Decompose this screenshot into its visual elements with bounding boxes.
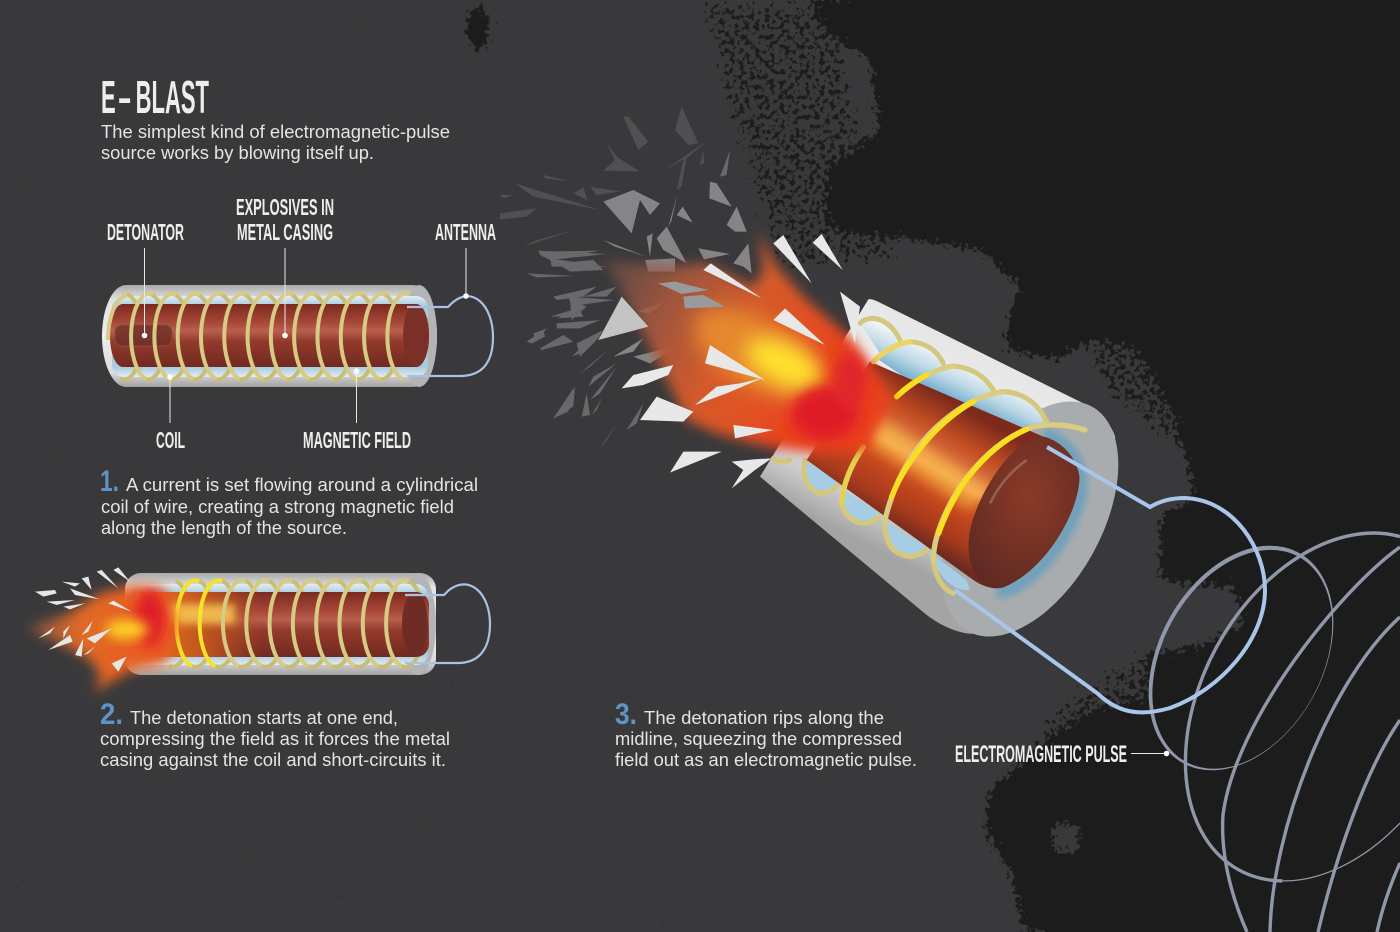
explosive core xyxy=(140,592,429,657)
diagram 2: detonation starts xyxy=(27,567,490,692)
label: explosives: EXPLOSIVES IN xyxy=(236,194,334,220)
fireball xyxy=(603,232,893,453)
explosive core xyxy=(807,362,1079,588)
label: detonator: DETONATOR xyxy=(107,219,184,245)
intro text: source works by blowing itself up. xyxy=(101,143,374,163)
leader line xyxy=(1131,752,1166,754)
step 1 text xyxy=(100,465,478,538)
pulse label xyxy=(955,741,1169,768)
antenna xyxy=(405,584,490,663)
cylinder body xyxy=(760,299,1155,666)
ring 4 xyxy=(1270,617,1400,932)
ring 6 xyxy=(1377,863,1400,932)
step 2 description: The detonation starts at one end, xyxy=(130,708,398,728)
number 2: 2. xyxy=(100,698,123,731)
label: magnetic field: MAGNETIC FIELD xyxy=(303,427,411,453)
explosive core xyxy=(110,304,429,367)
step 3 description: field out as an electromagnetic pulse. xyxy=(615,750,917,770)
hot coil strands xyxy=(176,580,222,666)
detonator xyxy=(115,325,172,346)
blue field glow xyxy=(860,318,1047,430)
coil rear strands xyxy=(169,581,424,667)
step 3 description xyxy=(615,708,917,770)
core end face xyxy=(969,437,1079,588)
antenna xyxy=(955,447,1265,712)
ring 2 xyxy=(1185,533,1400,881)
casing end cap xyxy=(401,285,437,387)
leader dots xyxy=(142,293,469,380)
pulse rings xyxy=(1111,513,1400,932)
front coil strands xyxy=(842,342,1085,560)
coil front strands xyxy=(108,293,410,379)
diagram 1: intact source xyxy=(102,285,493,387)
number 1: 1. xyxy=(100,465,119,498)
step 2 description: compressing the field as it forces the metal xyxy=(100,729,450,749)
shrapnel in fire xyxy=(658,282,725,308)
intro text xyxy=(101,122,450,163)
field band xyxy=(132,584,428,665)
step 3 description: midline, squeezing the compressed xyxy=(615,729,902,749)
intro text: The simplest kind of electromagnetic-pulse xyxy=(101,122,450,142)
antenna xyxy=(407,296,493,376)
label: coil: COIL xyxy=(156,427,185,453)
coil rear strands xyxy=(120,294,399,380)
step 3 text xyxy=(615,698,917,770)
title: E–BLAST xyxy=(101,71,209,123)
end cap xyxy=(400,573,436,675)
label text: ELECTROMAGNETIC PULSE xyxy=(955,741,1127,768)
leader lines xyxy=(144,248,466,423)
number 3: 3. xyxy=(615,698,637,731)
small explosion xyxy=(27,567,177,692)
label: metal casing: METAL CASING xyxy=(237,219,333,245)
step 2 text xyxy=(100,698,450,770)
leader dot xyxy=(1164,751,1169,756)
casing xyxy=(102,285,437,387)
rear coil strands xyxy=(773,318,1047,593)
shrapnel xyxy=(35,567,132,675)
casing xyxy=(125,573,436,675)
receding shrapnel xyxy=(500,107,708,247)
core heat glow xyxy=(867,413,993,510)
step 1 description: A current is set flowing around a cylindrical xyxy=(126,475,478,495)
casing end cap xyxy=(905,372,1155,666)
step 1 description xyxy=(101,475,478,538)
ring 5 xyxy=(1318,720,1400,932)
casing xyxy=(760,299,1115,634)
white shrapnel xyxy=(598,234,860,488)
ink splatter texture xyxy=(467,0,1400,932)
step 2 description: casing against the coil and short-circuits it. xyxy=(100,750,446,770)
ring 2 thin lower edge xyxy=(1282,823,1400,881)
core end face xyxy=(402,592,428,657)
fireball xyxy=(27,585,177,692)
step 3 description: The detonation rips along the xyxy=(644,708,884,728)
explosion and shrapnel xyxy=(500,107,893,488)
magnetic field band xyxy=(112,296,428,377)
mid shrapnel xyxy=(527,150,730,448)
labels for diagram 1 xyxy=(107,194,496,453)
step 1 description: coil of wire, creating a strong magnetic field xyxy=(101,497,454,517)
core end face xyxy=(403,304,429,367)
end face rim highlight xyxy=(990,460,1027,503)
near shrapnel xyxy=(603,182,752,363)
ring 3 xyxy=(1223,547,1400,932)
diagram 3: main exploding source xyxy=(500,107,1265,712)
label: antenna: ANTENNA xyxy=(435,219,496,245)
step 1 description: along the length of the source. xyxy=(101,518,347,538)
coil front strands xyxy=(223,580,409,666)
ring 1 xyxy=(1111,513,1371,803)
step 2 description xyxy=(100,708,450,770)
